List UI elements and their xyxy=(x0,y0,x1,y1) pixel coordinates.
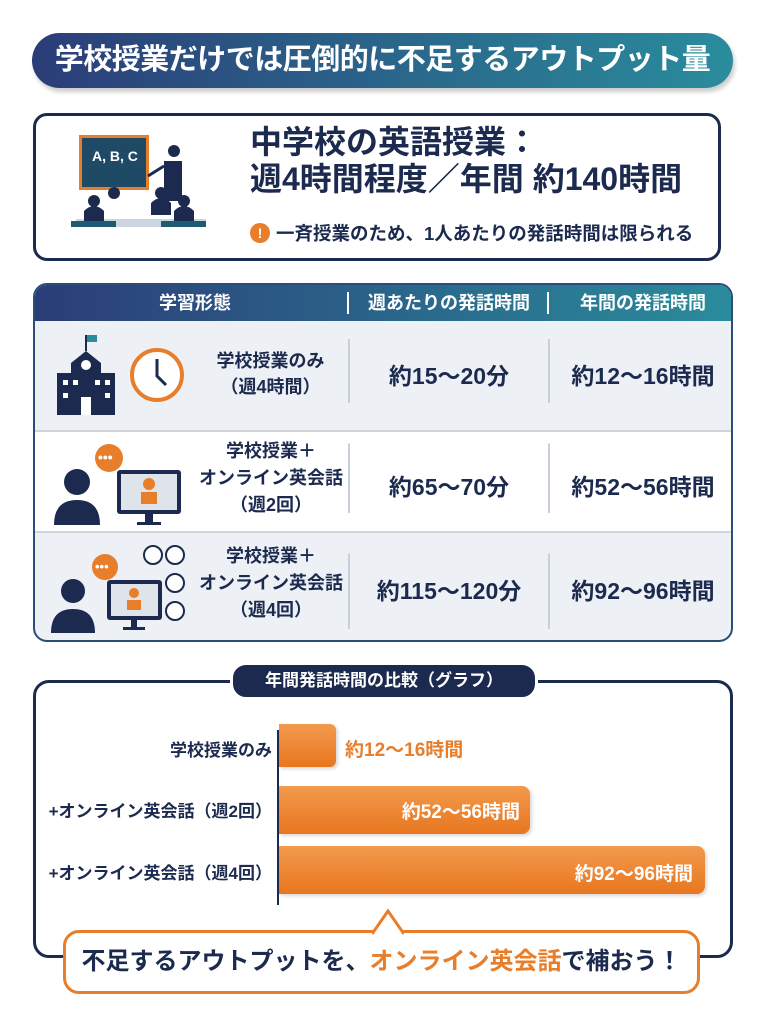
icon: learner, monitor and clocks xyxy=(51,545,185,633)
title xyxy=(32,33,733,88)
callout pointer xyxy=(372,909,404,935)
bar: school only: 学校授業のみ xyxy=(170,741,272,760)
row 2: オンライン英会話 xyxy=(199,468,343,488)
bar chart: 約92～96時間 xyxy=(575,864,693,885)
icon: learner, monitor and clocks: ••• xyxy=(95,559,109,574)
row 3: 約92～96時間 xyxy=(571,578,715,604)
note: 一斉授業のため、1人あたりの発話時間は限られる xyxy=(276,223,693,244)
table header: 週あたりの発話時間 xyxy=(368,293,530,313)
row 2: 約65～70分 xyxy=(389,474,509,500)
panel: bar chart xyxy=(33,680,733,958)
row 1: 学校授業のみ xyxy=(216,351,324,371)
bar: four times weekly: +オンライン英会話（週4回） xyxy=(49,864,272,883)
icon: classroom: A, B, C xyxy=(92,148,138,164)
bar chart xyxy=(49,724,708,905)
row 2: （週2回） xyxy=(230,495,312,515)
row 2 xyxy=(35,430,735,533)
table header xyxy=(35,285,735,321)
row 3: オンライン英会話 xyxy=(199,573,343,593)
table header: 学習形態 xyxy=(159,293,231,313)
title: 学校授業だけでは圧倒的に不足するアウトプット量 xyxy=(55,44,710,76)
row 1: 約15～20分 xyxy=(389,363,509,389)
column dividers xyxy=(348,339,350,629)
row 3 xyxy=(51,545,715,633)
table header: 年間の発話時間 xyxy=(580,293,706,313)
row 1 xyxy=(57,335,715,415)
bar chart: 約12～16時間 xyxy=(345,740,463,761)
note: ! xyxy=(258,225,262,241)
row 1: 約12～16時間 xyxy=(571,363,715,389)
headline: 中学校の英語授業： xyxy=(250,124,538,160)
callout xyxy=(63,930,700,994)
headline xyxy=(250,124,682,197)
row 1: （週4時間） xyxy=(220,377,320,397)
icon: classroom xyxy=(71,135,206,227)
bar chart: 約52～56時間 xyxy=(402,802,520,823)
icon: school and clock xyxy=(57,335,184,415)
row 3: 学校授業＋ xyxy=(226,546,316,566)
icon: headset learner and monitor: ••• xyxy=(98,449,113,465)
row 3: 約115～120分 xyxy=(377,578,521,604)
icon: headset learner and monitor xyxy=(54,444,181,525)
chart title pill: 年間発話時間の比較（グラフ） xyxy=(265,671,503,690)
chart title pill xyxy=(230,662,538,700)
bar: twice weekly: +オンライン英会話（週2回） xyxy=(49,802,272,821)
callout: 不足するアウトプットを、オンライン英会話で補おう！ xyxy=(82,948,682,975)
row 2: 約52～56時間 xyxy=(571,474,715,500)
row 2: 学校授業＋ xyxy=(226,441,316,461)
row 3: （週4回） xyxy=(230,600,312,620)
panel: school English classes xyxy=(33,113,721,261)
panel: comparison table xyxy=(33,283,733,642)
headline: 週4時間程度／年間 約140時間 xyxy=(250,161,682,197)
